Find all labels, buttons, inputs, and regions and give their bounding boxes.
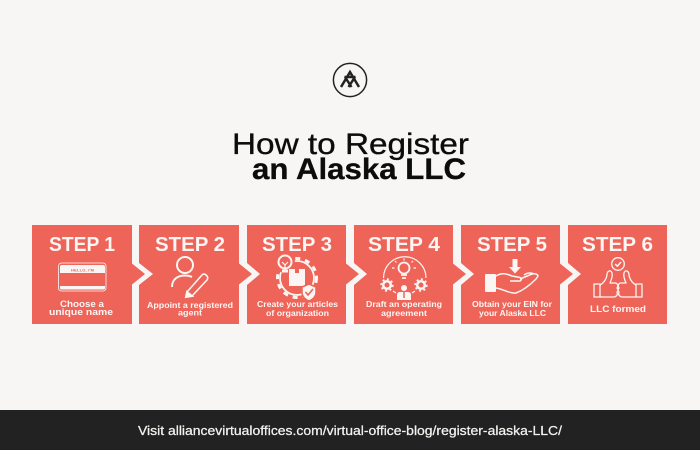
caption: step 2: agent [178,308,202,318]
caption: step 6: LLC formed [590,304,646,315]
panel: step 3 [247,225,359,324]
title: How to Register [232,128,469,161]
caption: step 5: your Alaska LLC [479,308,546,318]
icon: gear, bulb, box and shield [275,253,316,301]
footer bar: Visit alliancevirtualoffices.com/virtual-office-blog/register-alaska-LLC/ [138,423,562,438]
panel: step 1: STEP 1 [49,234,115,256]
panel: step 6 [568,225,667,324]
panel: step 3: STEP 3 [262,234,332,256]
icon: bulb, gears and person [381,257,427,300]
caption: step 2 [147,300,233,318]
caption: step 4: Draft an operating [366,299,442,309]
icon: company logo [333,63,367,97]
caption: step 3: Create your articles [257,299,338,309]
caption: step 5 [472,299,553,318]
caption: step 1: Choose a [60,299,105,310]
caption: step 1: unique name [49,307,113,318]
footer bar [0,410,700,450]
caption: step 4 [366,299,442,318]
caption: step 5: Obtain your EIN for [472,299,553,309]
icon: thumbs up with check [594,258,642,297]
caption: step 3: of organization [266,308,329,318]
panel: step 2: STEP 2 [155,234,225,256]
caption: step 3 [257,299,338,318]
panel: step 4: STEP 4 [368,234,441,256]
title: an Alaska LLC [252,153,466,186]
panel: step 5 [461,225,573,324]
icon: person with pencil [172,257,208,297]
title [232,128,469,186]
panel: step 6: STEP 6 [582,234,653,256]
icon: hand receiving arrow [485,259,538,293]
caption: step 1 [49,299,113,318]
caption: step 2: Appoint a registered [147,300,233,310]
panel: step 4 [354,225,466,324]
panel: step 2 [139,225,252,324]
caption: step 4: agreement [381,308,427,318]
icon: name tag: HELLO, I'M [71,267,95,272]
panel: step 1 [32,225,145,324]
panel: step 5: STEP 5 [477,234,547,256]
